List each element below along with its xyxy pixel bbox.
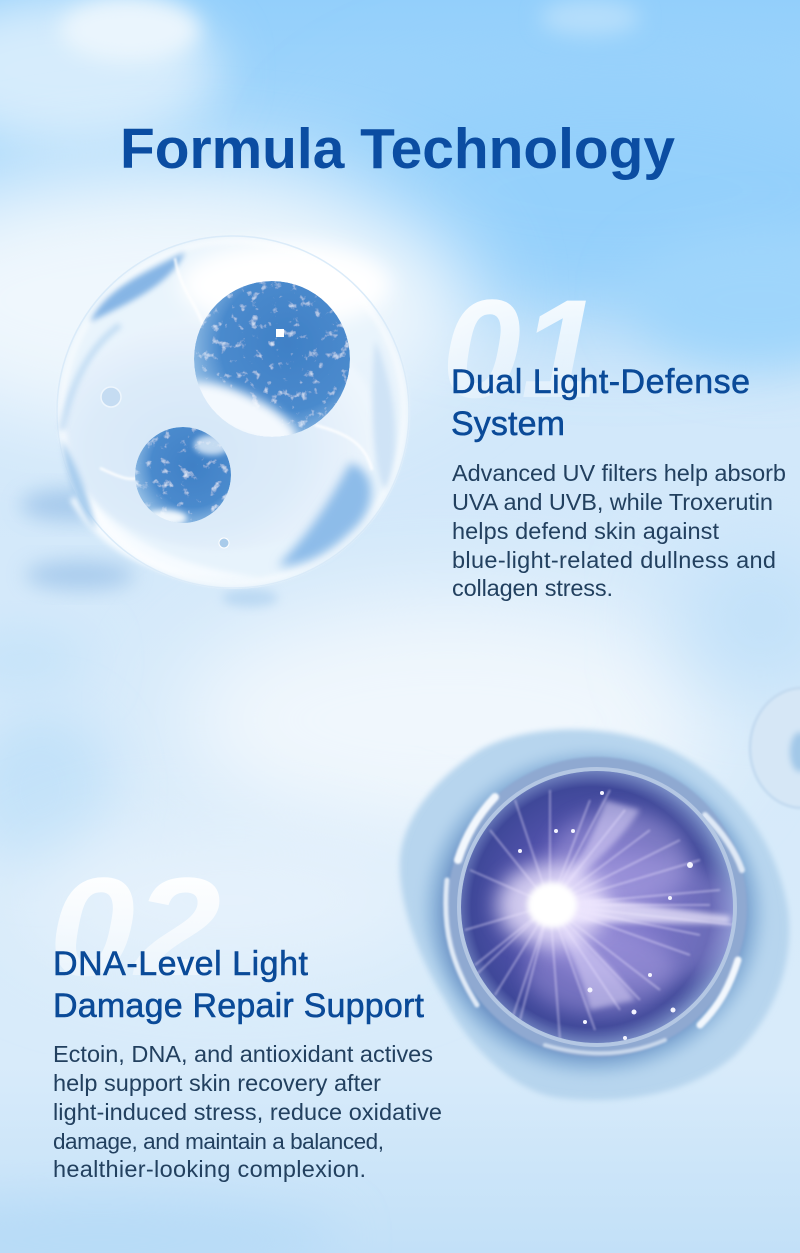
heading: Dual Light-Defense System: Dual Light-Defense	[451, 363, 750, 401]
icon: water bubble with two blue spheres	[56, 235, 410, 589]
text block: section 01 description: helps defend skin against	[452, 518, 719, 544]
icon: violet energy capsule	[400, 729, 789, 1100]
text block: section 02 description: healthier-looking complexion.	[53, 1156, 366, 1182]
text block: section 02 description	[53, 1041, 442, 1182]
text block: section 02 description: damage, and maintain a balanced,	[53, 1129, 384, 1154]
text block: section 02 description: Ectoin, DNA, and antioxidant actives	[53, 1041, 433, 1067]
number 02: 02	[49, 848, 221, 1005]
text block: section 01 description: Advanced UV filters help absorb	[452, 460, 786, 486]
text block: section 01 description	[452, 460, 786, 601]
text block: section 02 description: light-induced stress, reduce oxidative	[53, 1099, 442, 1125]
number 01: 01	[442, 270, 600, 427]
heading: DNA-Level Light Damage Repair Support: Damage Repair Support	[53, 987, 425, 1025]
heading: Dual Light-Defense System	[451, 363, 750, 443]
text block: section 02 description: help support skin recovery after	[53, 1070, 381, 1096]
icon: partial droplet at right edge	[750, 688, 800, 808]
text block: section 01 description: collagen stress.	[452, 575, 613, 601]
text block: section 01 description: UVA and UVB, while Troxerutin	[452, 489, 773, 515]
title: Formula Technology	[120, 117, 675, 181]
text block: section 01 description: blue-light-related dullness and	[452, 547, 776, 573]
heading: DNA-Level Light Damage Repair Support: DNA-Level Light	[53, 945, 309, 983]
heading: Dual Light-Defense System: System	[451, 405, 565, 443]
heading: DNA-Level Light Damage Repair Support	[53, 945, 425, 1025]
